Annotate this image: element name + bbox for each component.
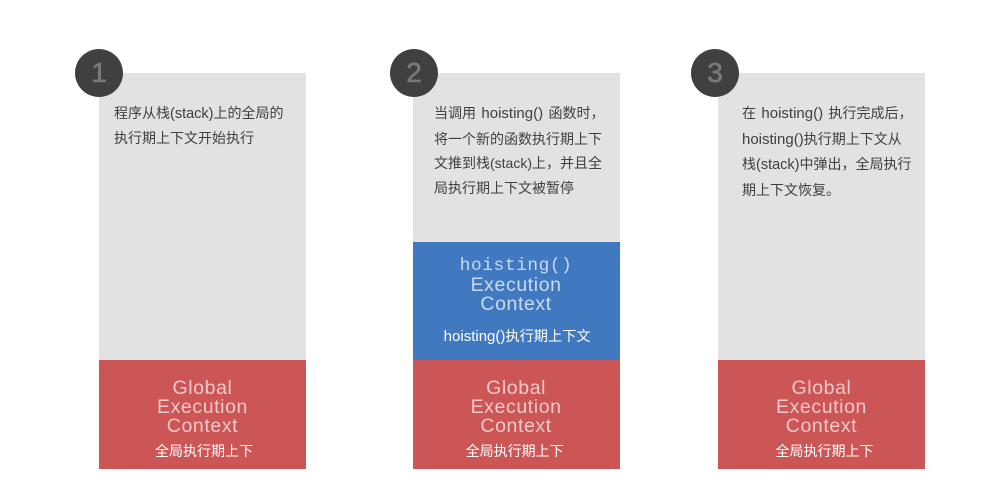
step 2 global context label: Global: [486, 377, 546, 399]
step 1 global context label: Execution: [157, 396, 248, 418]
step 1 global context label: Context: [167, 415, 238, 437]
step 2 description: [434, 105, 604, 196]
step 2 description: 文推到栈(stack)上，并且全: [434, 155, 602, 171]
step 2 function context Chinese label: hoisting()执行期上下文: [444, 328, 591, 344]
step 3 description: 在 hoisting() 执行完成后，: [742, 105, 912, 122]
number badge 2: 2: [406, 57, 422, 88]
step 3 global context label: Context: [786, 415, 857, 437]
step 1 global context label: Global: [173, 377, 232, 399]
step 2 global context label: Context: [480, 415, 552, 437]
number badge 1: 1: [91, 57, 107, 88]
step 1 description: [114, 105, 284, 146]
panel: step 1: [99, 73, 306, 469]
step 3 global context label: Execution: [776, 396, 867, 418]
step 3 global context Chinese label: 全局执行期上下: [776, 443, 874, 459]
step 3 description: hoisting()执行期上下文从: [742, 131, 902, 148]
step 1 description: 程序从栈(stack)上的全局的: [114, 105, 284, 122]
step 2 function context label: hoisting(): [460, 256, 572, 276]
panel: step 2: [413, 73, 620, 469]
step 2 function context label: Context: [480, 292, 552, 314]
step 2 global context label: [471, 377, 562, 437]
step 2 description: 将一个新的函数执行期上下: [434, 131, 602, 147]
step 2 global context block: [413, 360, 620, 469]
step 1 global context label: [157, 377, 248, 437]
number badge 1: [75, 49, 123, 97]
step 2 function context block: [413, 242, 620, 360]
step 1 global context block: [99, 360, 306, 469]
number badge 3: [691, 49, 739, 97]
panel: step 3: [718, 73, 925, 469]
step 1 global context Chinese label: 全局执行期上下: [155, 443, 253, 459]
step 3 description: 期上下文恢复。: [742, 182, 840, 198]
step 2 function context label: [460, 256, 572, 314]
step 2 global context label: Execution: [471, 396, 562, 418]
step 3 global context label: [776, 377, 867, 437]
step 3 description: [742, 105, 912, 198]
step 3 global context block: [718, 360, 925, 469]
step 2 global context Chinese label: 全局执行期上下: [466, 443, 564, 459]
step 2 description: 局执行期上下文被暂停: [434, 180, 574, 196]
number badge 2: [390, 49, 438, 97]
step 3 description: 栈(stack)中弹出，全局执行: [742, 156, 912, 173]
number badge 3: 3: [707, 57, 723, 88]
step 2 function context label: Execution: [471, 274, 562, 296]
step 1 description: 执行期上下文开始执行: [114, 130, 254, 146]
step 2 description: 当调用 hoisting() 函数时，: [434, 105, 604, 122]
step 3 global context label: Global: [792, 377, 851, 399]
